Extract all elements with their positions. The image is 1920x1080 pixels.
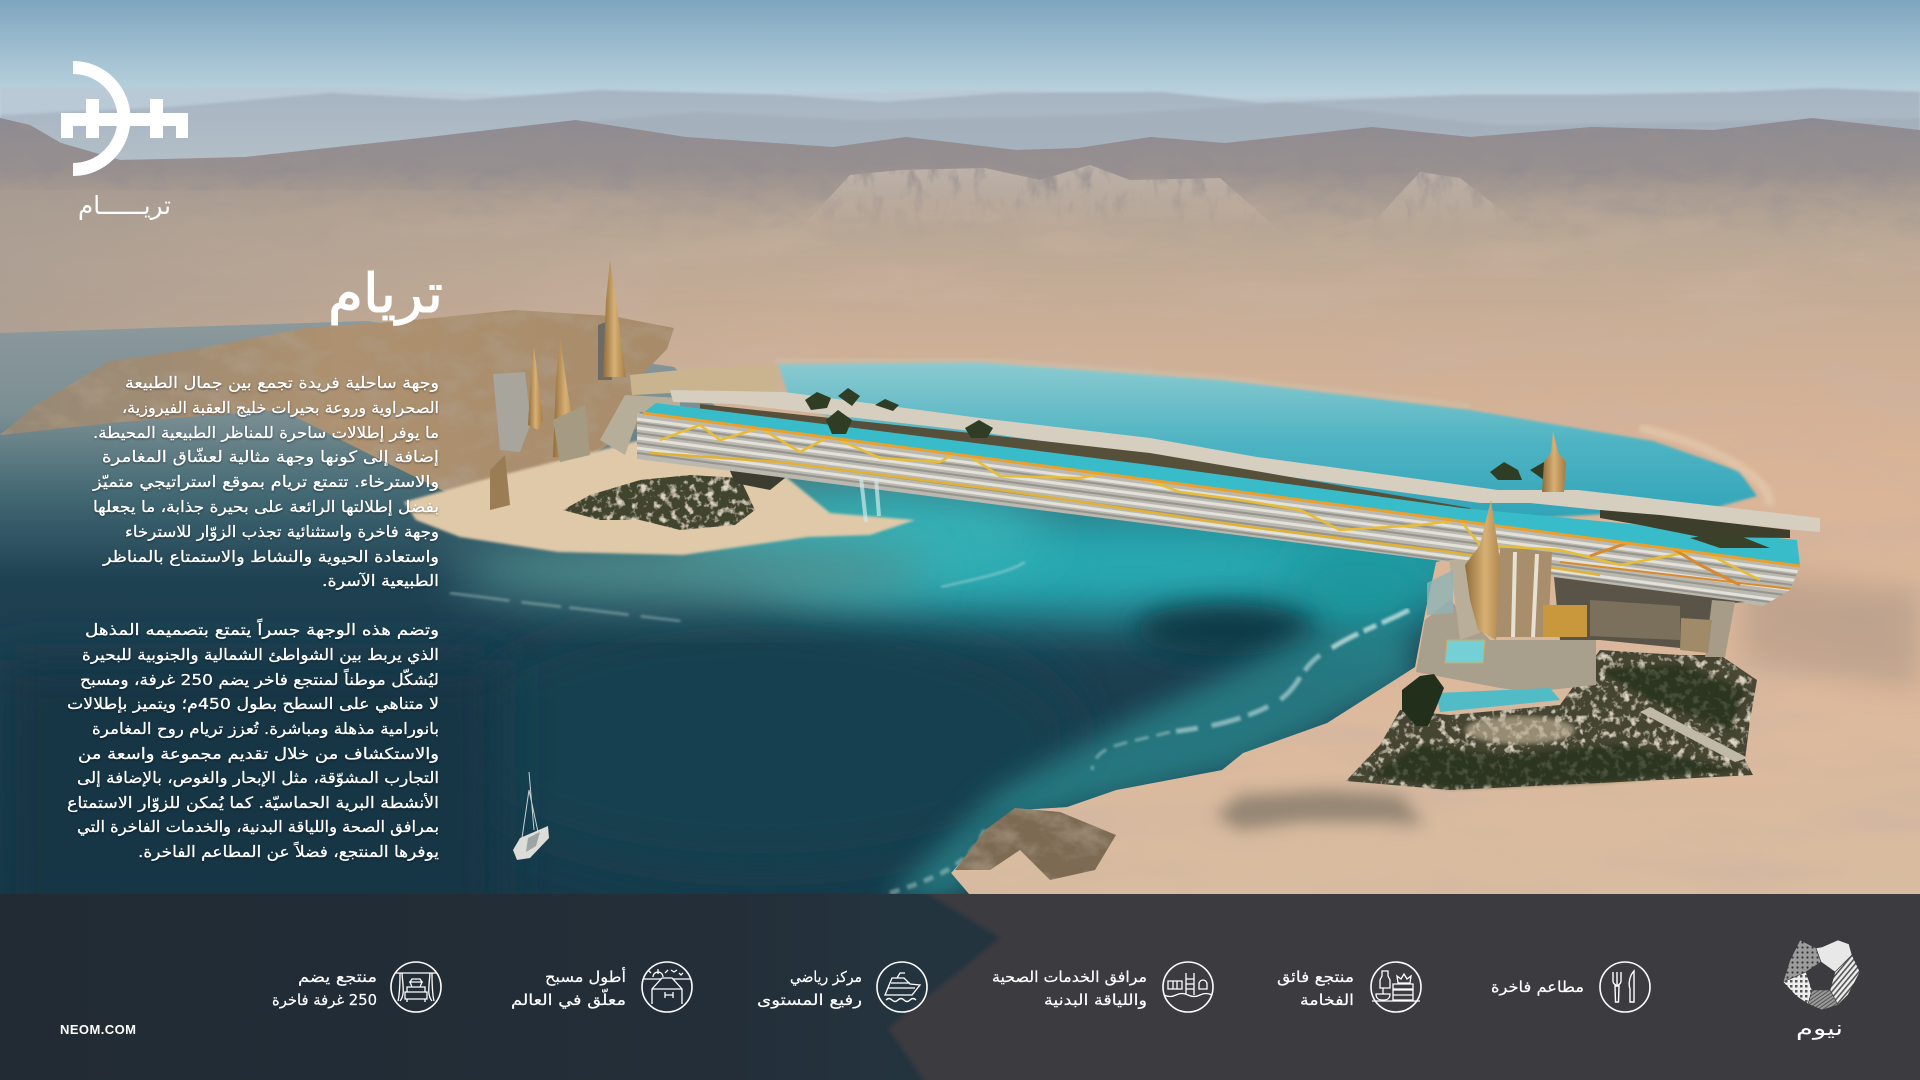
glass annex	[1427, 570, 1453, 615]
bottom information bar	[0, 880, 1920, 1080]
upper platform building	[630, 365, 777, 395]
logo wordmark: نيوم	[1796, 1016, 1843, 1040]
feature: 250 rooms	[272, 962, 441, 1012]
pale rocky outcrop	[790, 165, 1540, 240]
shore waves	[1329, 610, 1409, 650]
dark tower behind spire	[598, 322, 612, 380]
desert sand	[0, 170, 1920, 950]
paragraph one: الطبيعية الآسرة.	[322, 572, 439, 590]
paragraph one: والاسترخاء. تتمتع تريام بموقع استراتيجي متميّز	[92, 473, 439, 492]
feature: longest suspended pool	[511, 962, 692, 1012]
icon: towels and bottle	[1371, 962, 1421, 1012]
tall golden spire	[603, 260, 626, 377]
label	[1277, 968, 1354, 1009]
curved concrete slab	[1449, 560, 1480, 640]
bridge body	[630, 405, 1810, 615]
label: أطول مسبح	[545, 967, 626, 986]
icon: pool and sun	[642, 962, 692, 1012]
garden path	[1640, 707, 1748, 762]
icon: pool ladder and dumbbell	[1163, 962, 1213, 1012]
feature: ultra luxury resort	[1277, 962, 1421, 1012]
gold roof terrace	[1543, 605, 1587, 637]
label: الفخامة	[1300, 991, 1354, 1009]
paragraph two: الذي يربط بين الشواطئ الشمالية والجنوبية للبحيرة	[82, 646, 439, 665]
recess under bridge	[1554, 577, 1745, 650]
pool edge planting on right	[1600, 510, 1790, 538]
golden tower	[1465, 500, 1505, 640]
infinity pool bridge	[630, 388, 1820, 615]
icon: yacht	[877, 962, 927, 1012]
feature: luxury restaurants	[1491, 962, 1650, 1012]
paragraph one: وجهة فاخرة واستثنائية تجذب الزوّار للاسترخاء	[125, 523, 439, 542]
right resort complex	[1402, 500, 1748, 762]
logo mark	[1783, 940, 1860, 1010]
near mountains	[0, 118, 1920, 300]
far mountains	[0, 87, 1920, 200]
paragraph two: بمرافق الصحة واللياقة البدنية، والخدمات الفاخرة التي	[77, 818, 439, 837]
heading: تريام	[328, 262, 443, 325]
under-bridge shadow	[728, 466, 790, 490]
paragraph two: يوفرها المنتجع، فضلاً عن المطاعم الفاخرة.	[138, 842, 439, 862]
concrete podium	[600, 395, 680, 455]
paragraph two	[67, 619, 439, 862]
label	[992, 968, 1147, 1009]
low tower group	[553, 405, 590, 462]
lagoon tower	[1542, 431, 1566, 492]
sailboat	[513, 772, 549, 860]
label: منتجع فائق	[1277, 968, 1354, 986]
icon: fork and knife	[1600, 962, 1650, 1012]
paragraph two: والاستكشاف من خلال تقديم مجموعة واسعة من	[78, 745, 439, 764]
paragraph two: بانورامية مذهلة ومباشرة. تُعزز تريام روح المغامرة	[92, 720, 439, 739]
label: مطاعم فاخرة	[1491, 978, 1584, 996]
logo: Triam mark	[61, 68, 188, 220]
terrace underside and planting	[700, 404, 1480, 516]
logo wordmark: تريــــــام	[78, 191, 171, 220]
paragraph one: ما يوفر إطلالات ساحرة للمناظر الطبيعية المحيطة.	[93, 424, 439, 442]
icon: bed and curtains	[391, 962, 441, 1012]
label: معلّق في العالم	[511, 989, 626, 1010]
dark garden foliage	[1370, 665, 1745, 788]
label: واللياقة البدنية	[1044, 991, 1147, 1009]
label: 250 غرفة فاخرة	[272, 991, 377, 1009]
paragraph one: وجهة ساحلية فريدة تجمع بين جمال الطبيعة	[125, 374, 439, 393]
foreground dune rock right	[1215, 790, 1425, 830]
long lower pool	[1436, 688, 1560, 712]
paragraph one: واستعادة الحيوية والنشاط والاستمتاع بالمناظر	[102, 548, 439, 567]
NEOM logo	[1783, 940, 1860, 1040]
label: منتجع يضم	[298, 968, 377, 986]
feature: wellness and fitness	[992, 962, 1213, 1012]
yellow service lines	[660, 425, 1760, 580]
label	[757, 968, 862, 1009]
lagoon sand rim	[1640, 428, 1770, 505]
palm cluster	[1402, 674, 1444, 726]
dark patch near shore	[1135, 604, 1315, 656]
dark left sea	[6, 654, 494, 846]
paragraph two: وتضم هذه الوجهة جسراً يتمتع بتصميمه المذهل	[85, 619, 439, 640]
middle mountains	[0, 88, 1920, 220]
sea	[0, 321, 1441, 894]
haze over left desert	[0, 190, 1920, 380]
reef foam streaks	[450, 593, 688, 622]
paragraph two: الأنشطة البرية الحماسيّة. كما يُمكن للزوّار الاستمتاع	[67, 793, 439, 813]
sand shadow beside right structure	[1740, 570, 1920, 690]
neom.com link text: NEOM.COM	[60, 1022, 136, 1037]
orange pool edge	[643, 413, 1800, 566]
label: مرافق الخدمات الصحية	[992, 968, 1147, 986]
grey rock building	[493, 372, 531, 452]
label: مركز رياضي	[790, 968, 862, 987]
inner blue ridge	[490, 103, 1920, 230]
right island vegetation	[1346, 650, 1757, 790]
waterfalls	[861, 478, 879, 522]
side building	[1680, 618, 1712, 653]
infinity pool	[643, 403, 1800, 566]
paragraph two: لا متناهي على السطح بطول 450م؛ ويتميز بإطلالات	[67, 695, 439, 714]
left resort towers	[490, 260, 790, 510]
paragraph one: بفضل إطلالتها الرائعة على بحيرة جذابة، ما يجعلها	[93, 498, 439, 517]
palms on terrace	[805, 388, 1556, 480]
left island beach	[404, 441, 915, 555]
bar grey land zone	[888, 880, 1920, 1080]
paragraph one: إضافة إلى كونها وجهة مثالية لعشّاق المغامرة	[102, 448, 439, 467]
golden spires	[553, 338, 578, 457]
rocks in garden	[1465, 716, 1575, 744]
left rocky hill	[0, 310, 674, 514]
label	[511, 967, 626, 1010]
turquoise water under bridge	[760, 510, 1500, 620]
lagoon	[778, 362, 1757, 520]
sky	[0, 0, 1920, 150]
paragraph one	[92, 374, 439, 590]
small pool	[1445, 640, 1485, 663]
paragraph one: الصحراوية وروعة بحيرات خليج العقبة الفيروزية،	[122, 399, 439, 418]
logo bar with teeth	[61, 99, 188, 138]
label: رفيع المستوى	[757, 991, 862, 1009]
logo arc	[73, 68, 124, 170]
deep water	[526, 626, 1064, 810]
paragraph two: التجارب المشوّقة، مثل الإبحار والغوص، بالإضافة إلى	[77, 769, 439, 788]
feature: sports centre	[757, 962, 927, 1012]
paragraph two: ليُشكّل موطناً لمنتجع فاخر يضم 250 غرفة، ومسبح	[80, 669, 439, 690]
glass tower block	[1496, 548, 1552, 637]
foreground dune rock left	[955, 808, 1116, 880]
concrete base	[1416, 600, 1596, 692]
left island vegetation	[563, 475, 755, 530]
bar background	[0, 894, 1920, 1080]
back terrace	[670, 390, 1820, 532]
support column	[1705, 600, 1735, 657]
inner recess room	[1590, 600, 1680, 640]
shallow teal near shore	[885, 620, 1420, 900]
label	[272, 968, 377, 1009]
